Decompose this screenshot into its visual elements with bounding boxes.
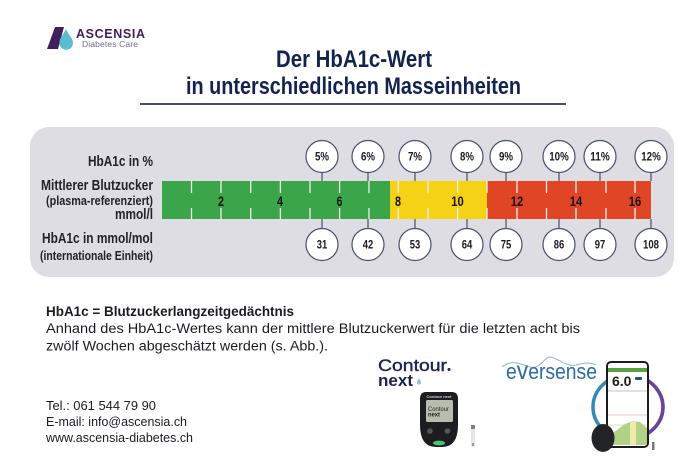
green range [162, 181, 390, 219]
logo tagline: Diabetes Care [82, 39, 138, 49]
row labels [40, 153, 153, 263]
bar numbers: 14 [570, 193, 582, 209]
mmol/mol values: 64 [462, 238, 472, 252]
icon: blood glucose meter: next [428, 412, 440, 418]
glucose reading: 6.0 [612, 373, 632, 389]
row labels: mmol/l [115, 206, 153, 223]
mmol/mol values: 53 [410, 238, 420, 252]
panel: HbA1c scale [30, 127, 674, 277]
icon: blood glucose meter [420, 392, 458, 447]
phone [607, 362, 648, 447]
yellow range [390, 181, 487, 219]
red range [487, 181, 651, 219]
mmol/mol values: 97 [595, 238, 605, 252]
title underline [140, 103, 566, 105]
mmol/mol values [317, 238, 659, 252]
explanatory text [46, 304, 580, 354]
bar numbers: 6 [336, 193, 343, 209]
bar numbers: 16 [629, 193, 641, 209]
mmol/mol values: 75 [501, 238, 511, 252]
connector lines [322, 172, 651, 228]
mmol/mol values: 42 [363, 238, 373, 252]
contact details [45, 399, 193, 445]
row labels: HbA1c in mmol/mol [42, 230, 153, 247]
row labels: (internationale Einheit) [40, 248, 153, 263]
bar numbers: 12 [511, 193, 523, 209]
logo wave [502, 357, 596, 367]
percent values: 12% [641, 150, 661, 164]
explanatory text: zwölf Wochen abgeschätzt werden (s. Abb.). [46, 338, 328, 354]
transmitter pin [652, 442, 654, 450]
title: Der HbA1c-Wert [276, 46, 432, 73]
panel background [30, 127, 674, 277]
logo wordmark: eversense [506, 355, 597, 385]
trend arrow [635, 377, 642, 380]
logo: Ascensia Diabetes Care [47, 27, 145, 50]
icon: blood glucose meter: Contour [428, 406, 450, 413]
percent values: 5% [315, 150, 329, 164]
colour bar: mmol/l [162, 181, 651, 219]
title [186, 46, 521, 100]
percent values: 6% [361, 150, 375, 164]
logo: Contour next: Contour [378, 356, 447, 375]
tick marks [192, 181, 635, 219]
contact details: E-mail: info@ascensia.ch [46, 415, 187, 429]
percent values: 10% [549, 150, 569, 164]
title: in unterschiedlichen Masseinheiten [186, 73, 521, 100]
percent values: 11% [590, 150, 610, 164]
row labels: Mittlerer Blutzucker [41, 177, 153, 194]
icon: test strip [471, 425, 475, 447]
percent values: 9% [499, 150, 513, 164]
icon: blood glucose meter: Contour next [427, 394, 452, 399]
icon: logo mark [47, 27, 73, 50]
icon: Eversense app and sensor [592, 362, 663, 452]
percent circles [306, 140, 667, 172]
sensor [592, 424, 614, 452]
mmol/mol values: 31 [317, 238, 327, 252]
row labels: HbA1c in % [88, 153, 153, 170]
logo: Contour next [378, 356, 450, 390]
contact details: Tel.: 061 544 79 90 [46, 399, 156, 413]
bar numbers: 8 [395, 193, 401, 209]
bar numbers [218, 193, 641, 209]
target band [630, 422, 636, 445]
bar numbers: 2 [218, 193, 224, 209]
explanatory text: Anhand des HbA1c-Wertes kann der mittlere Blutzuckerwert für die letzten acht bis [46, 321, 580, 336]
app header [608, 368, 647, 372]
ring [593, 375, 663, 439]
graph grid [608, 391, 647, 425]
bar numbers: 10 [451, 193, 464, 209]
percent values: 7% [408, 150, 422, 164]
mmol/mol values: 108 [643, 238, 659, 252]
percent values: 8% [460, 150, 474, 164]
logo: Eversense [502, 355, 597, 385]
logo: Contour next: next [378, 371, 413, 390]
logo wordmark: ASCENSIA [76, 27, 145, 41]
contact details: www.ascensia-diabetes.ch [45, 431, 193, 445]
row labels: (plasma-referenziert) [46, 193, 153, 208]
mmol/mol values: 86 [554, 238, 564, 252]
percent values [315, 150, 661, 164]
explanatory text: HbA1c = Blutzuckerlangzeitgedächtnis [46, 304, 294, 319]
mmol/mol circles [306, 228, 667, 260]
bar numbers: 4 [277, 193, 283, 209]
graph area [613, 421, 647, 445]
